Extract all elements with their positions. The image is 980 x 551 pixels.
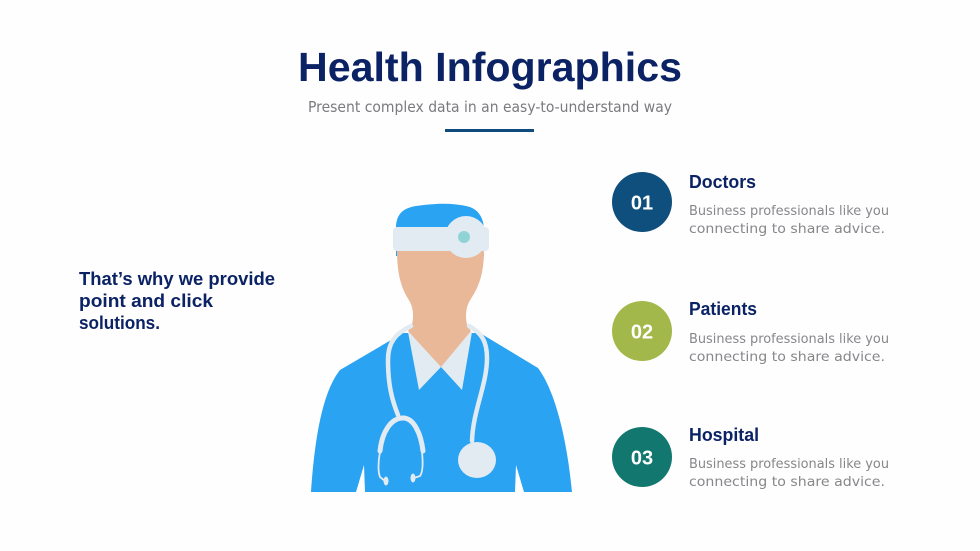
number badge 03 <box>612 427 672 487</box>
description: Patients: Business professionals like you <box>689 331 889 347</box>
item 03: Hospital <box>612 424 889 490</box>
face and neck <box>397 251 484 367</box>
number badge 02 <box>612 301 672 361</box>
title: Health Infographics <box>298 44 682 90</box>
heading: Patients: Patients <box>689 298 757 319</box>
head mirror lens <box>458 231 470 243</box>
description: Hospital: Business professionals like you <box>689 456 889 472</box>
scrubs body <box>311 333 572 492</box>
description: Doctors: connecting to share advice. <box>689 221 885 237</box>
number badge 01 <box>612 172 672 232</box>
left statement text: point and click <box>79 290 214 311</box>
description: Doctors: Business professionals like you <box>689 203 889 219</box>
description: Doctors <box>689 203 889 237</box>
number badge 01: 01 <box>631 192 653 214</box>
number badge 02: 02 <box>631 322 653 344</box>
head mirror band <box>393 227 489 251</box>
subtitle: Present complex data in an easy-to-understand way <box>308 98 672 116</box>
item 02: Patients <box>612 298 889 365</box>
title underline <box>445 129 534 132</box>
left statement text <box>79 268 275 333</box>
head mirror disc <box>445 216 487 258</box>
left statement text: solutions. <box>79 312 160 333</box>
description: Hospital: connecting to share advice. <box>689 474 885 490</box>
heading: Doctors: Doctors <box>689 171 756 192</box>
description: Patients <box>689 331 889 365</box>
number badge 03: 03 <box>631 448 653 470</box>
surgical cap <box>396 204 484 256</box>
doctor illustration <box>311 204 572 492</box>
description: Patients: connecting to share advice. <box>689 349 885 365</box>
left statement text: That’s why we provide <box>79 268 275 289</box>
description: Hospital <box>689 456 889 490</box>
stethoscope <box>378 326 496 486</box>
collar <box>408 332 472 390</box>
heading: Hospital: Hospital <box>689 424 759 445</box>
item 01: Doctors <box>612 171 889 237</box>
